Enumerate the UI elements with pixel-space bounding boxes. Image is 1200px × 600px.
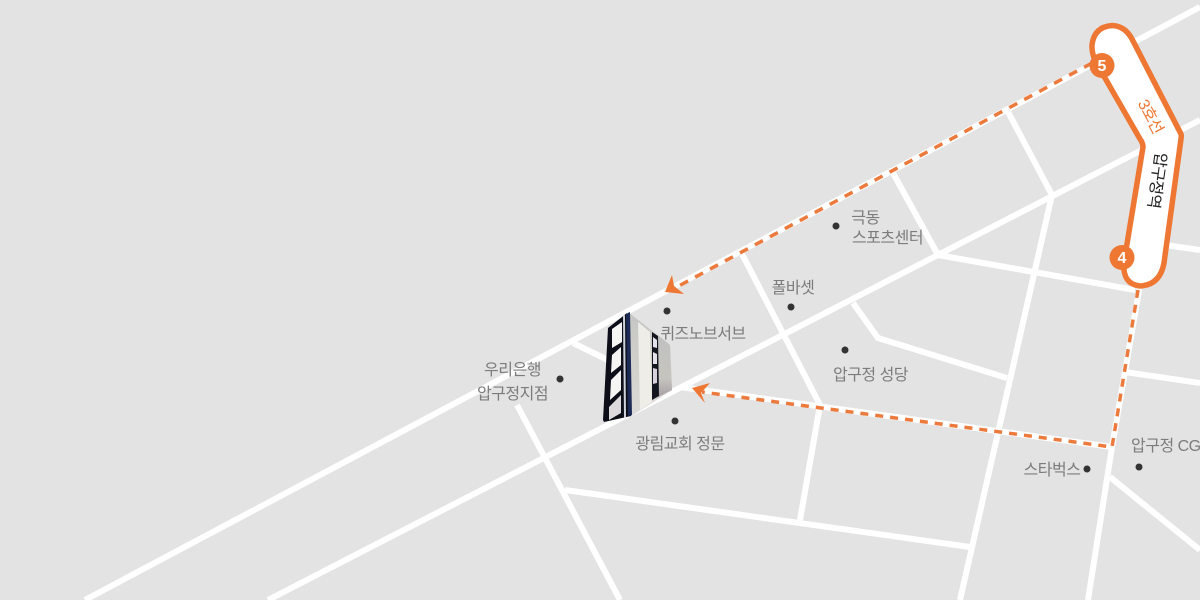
windows: front [609,322,622,420]
arrowhead: exit 4 route [692,383,710,403]
landmark: Apgujeong cathedral [833,346,909,384]
landmark: Starbucks: 스타벅스 [1024,461,1080,479]
windows: side [653,337,657,384]
landmark: Kwanglim church: 광림교회 정문 [635,435,725,453]
arrowhead: exit 5 route [665,275,684,294]
route: exit 4 to building [692,290,1138,447]
landmark: Apgujeong cathedral: 압구정 성당 [833,366,909,384]
exit 4 [1110,245,1134,270]
landmark: Paul Bassett [772,279,814,310]
landmark: Apgujeong CGV [1131,437,1200,470]
station: Apgujeong [1090,26,1181,286]
landmark: Geukdong sports center: 극동 [851,210,880,227]
landmark: Woori Bank: 압구정지점 [477,385,548,403]
exit 5 [1090,53,1114,78]
landmark: Woori Bank: 우리은행 [484,361,541,379]
exit 4: 4 [1118,250,1127,267]
landmark: Woori Bank [477,361,564,403]
landmark: Quiznos [660,308,746,343]
landmark: Geukdong sports center [832,210,923,247]
landmark: Geukdong sports center: 스포츠센터 [852,229,923,247]
building [603,312,672,422]
station name: 압구정역 [1144,151,1170,209]
landmark: Paul Bassett: 폴바셋 [772,279,814,297]
landmark: Quiznos: 퀴즈노브서브 [660,325,746,343]
landmark: Kwanglim church [635,418,725,453]
line label: 3호선 [1134,97,1167,137]
route: exit 5 to building [665,63,1092,294]
exit 5: 5 [1098,58,1107,75]
